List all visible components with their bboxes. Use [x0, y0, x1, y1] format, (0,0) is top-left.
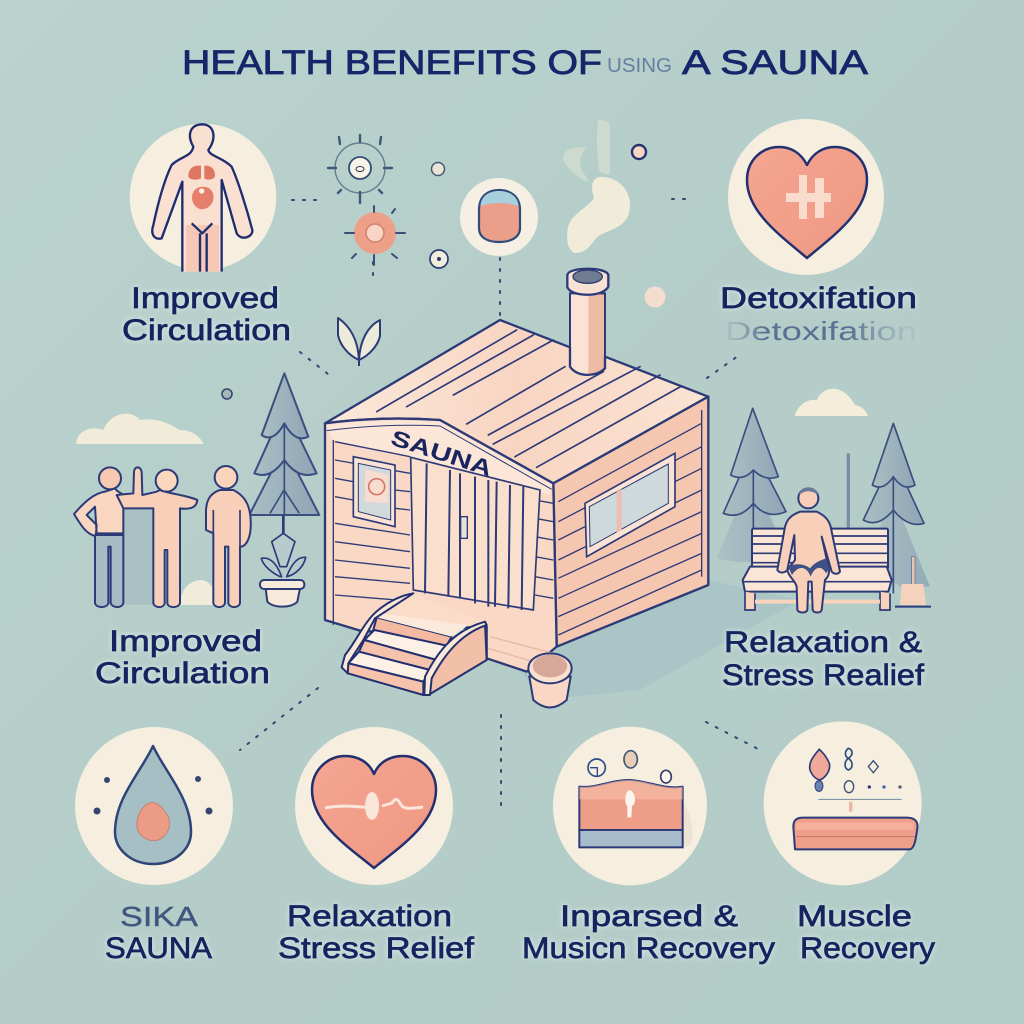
panel: water drop icon: [75, 727, 233, 885]
bottom labels: Stress Relief: [278, 932, 475, 965]
tree: [863, 423, 930, 593]
chimney: [567, 269, 608, 375]
icon: cross mark: [786, 175, 831, 219]
right window: [585, 453, 675, 557]
front wall: [325, 419, 557, 672]
bottom labels: Muscle: [797, 900, 912, 933]
roof: [325, 320, 708, 483]
tree: [717, 408, 787, 562]
shovel and box: [895, 557, 931, 607]
cloud: [795, 389, 868, 416]
title: USING: [607, 55, 672, 77]
panel: heart icon bottom: [295, 727, 453, 885]
panel: body circulation icon: [130, 124, 276, 272]
icon: round thermometer badge: [460, 178, 538, 256]
title: [182, 44, 868, 82]
bottom labels: SAUNA: [105, 932, 212, 965]
title: HEALTH BENEFITS OF: [182, 44, 602, 82]
sauna labels top: [122, 282, 917, 347]
bottom labels: Musicn Recovery: [522, 932, 775, 965]
panel: heart icon top right: [728, 119, 884, 275]
door: [411, 457, 540, 610]
side labels middle: [95, 625, 925, 692]
icon: leaf: [338, 318, 380, 366]
person 1: [74, 467, 153, 607]
right wall: [553, 397, 708, 647]
side panel: [425, 623, 487, 695]
bottom labels: [105, 900, 935, 965]
side labels middle: Relaxation &: [724, 626, 922, 659]
rock: [180, 580, 217, 605]
platform: [375, 593, 485, 637]
left window: [353, 457, 395, 527]
bottom labels: Recovery: [800, 932, 935, 965]
right rail: [424, 622, 487, 695]
sign: sauna: SAUNA: [388, 425, 496, 481]
side labels middle: Stress Realief: [722, 659, 925, 692]
shadow under sauna: [500, 580, 800, 700]
sauna labels top: Detoxifation: [720, 282, 917, 315]
bottom labels: Relaxation: [287, 900, 452, 933]
plant: [260, 515, 306, 607]
title: A SAUNA: [682, 44, 868, 82]
steps: [342, 593, 487, 695]
sauna labels top: Improved: [131, 282, 279, 315]
person 3: [206, 466, 251, 607]
pole: [847, 453, 850, 528]
icon: steam: [563, 120, 630, 253]
bottom labels: Inparsed &: [560, 900, 738, 933]
person 2: [117, 467, 197, 607]
illustration: sauna house: [325, 269, 708, 707]
illustration: group of people, tree and plant: [74, 373, 319, 607]
treads and risers: [373, 617, 452, 646]
illustration: relaxing person on bench with trees: [717, 389, 931, 612]
side labels middle: Improved: [109, 625, 262, 658]
sauna labels top: Detoxifation: [725, 316, 917, 346]
tree: [249, 373, 319, 515]
icon: sun circle: [328, 135, 392, 203]
left rail: [342, 593, 413, 673]
side labels middle: Circulation: [95, 657, 270, 690]
seated person: [777, 487, 840, 612]
dotted connector lines: [240, 199, 760, 812]
cloud: [76, 414, 203, 444]
panel: muscle mat icon: [764, 721, 922, 885]
bench: [743, 529, 892, 610]
bucket: [528, 653, 572, 707]
panel: heated mat icon: [553, 727, 707, 885]
icon: red sun: [345, 206, 405, 265]
icon: small round dots: [222, 145, 666, 399]
icon: lungs and stomach organs: [188, 166, 215, 209]
sauna labels top: Circulation: [122, 314, 291, 347]
bottom labels: SIKA: [120, 901, 198, 932]
